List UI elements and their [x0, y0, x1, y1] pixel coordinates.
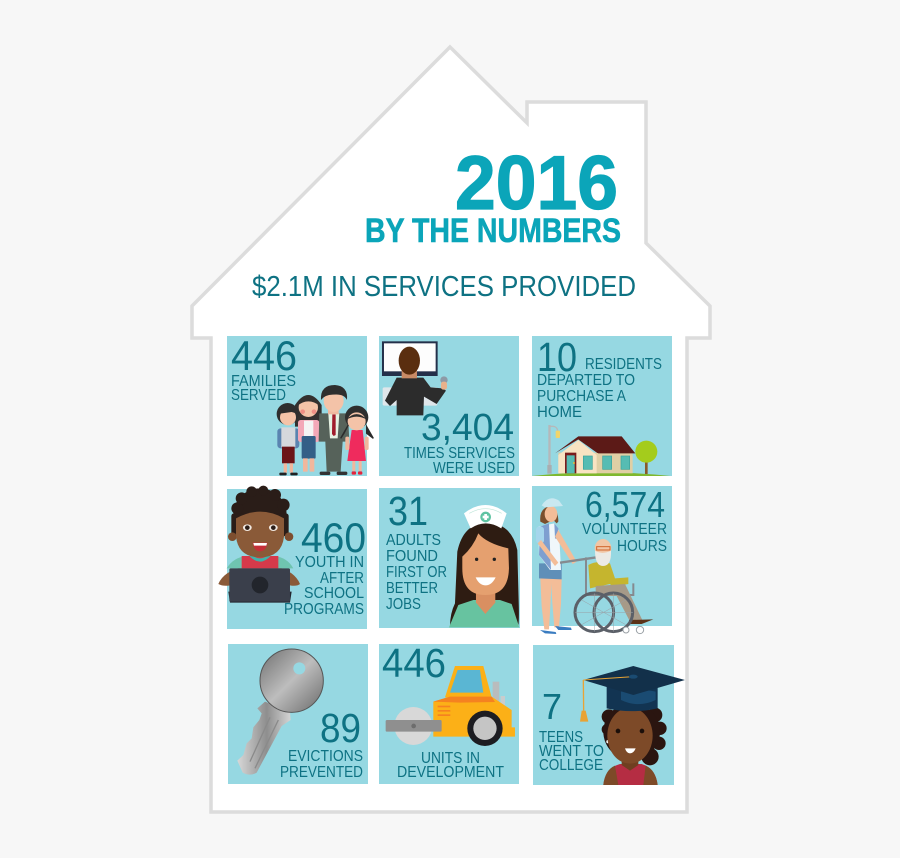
label: times services were used: WERE USED	[433, 460, 515, 477]
subheading: services provided: $2.1M IN SERVICES PROVIDED	[252, 271, 636, 303]
label: evictions prevented	[280, 748, 363, 781]
stat: 460: 460	[301, 514, 366, 561]
stat: 6,574: 6,574	[585, 484, 665, 525]
label: evictions prevented: EVICTIONS	[288, 748, 363, 765]
label: adults found first or better jobs: BETTER	[386, 580, 438, 597]
icon: person at touch screen	[382, 341, 448, 415]
label: teens went to college: COLLEGE	[539, 757, 603, 774]
label: times services were used	[404, 445, 515, 477]
heading: by the numbers: BY THE NUMBERS	[365, 212, 621, 250]
panel: families served	[227, 332, 373, 476]
panel: youth in after school programs	[218, 486, 367, 629]
label: youth in after school programs	[284, 554, 364, 618]
label: residents departed: PURCHASE A	[537, 388, 627, 405]
stat: 3,404: 3,404	[421, 407, 514, 449]
label: times services were used: TIMES SERVICES	[404, 445, 515, 462]
title: 2016: 2016	[455, 141, 618, 226]
panel: adults found jobs	[379, 488, 520, 628]
label: units in development: DEVELOPMENT	[397, 764, 504, 781]
label: youth in after school programs: AFTER	[320, 570, 364, 587]
panel: teens went to college	[533, 645, 685, 785]
label: residents departed	[537, 356, 662, 421]
icon: graduate	[580, 666, 685, 785]
label: units in development: UNITS IN	[421, 750, 480, 767]
icon: family	[277, 385, 373, 475]
label: volunteer hours: HOURS	[617, 538, 667, 555]
stat: 7: 7	[542, 686, 562, 727]
label: adults found first or better jobs: ADULTS	[386, 532, 441, 549]
label: residents departed: RESIDENTS	[585, 356, 662, 373]
label: volunteer hours	[582, 521, 667, 555]
panel: units in development	[379, 640, 519, 784]
panel: services used	[379, 336, 519, 477]
panel: volunteer hours	[532, 484, 672, 634]
label: teens went to college: TEENS	[539, 729, 583, 746]
stat: 446 families: 446	[231, 332, 297, 379]
label: youth in after school programs: YOUTH IN	[295, 554, 364, 571]
label: families served: FAMILIES	[231, 373, 296, 390]
label: volunteer hours: VOLUNTEER	[582, 521, 667, 538]
label: youth in after school programs: SCHOOL	[304, 585, 364, 602]
label: adults found first or better jobs	[386, 532, 447, 613]
icon: house with tree and lamp	[532, 425, 671, 476]
label: teens went to college: WENT TO	[539, 743, 604, 760]
panel: residents purchased a home	[532, 334, 672, 476]
label: residents departed: DEPARTED TO	[537, 372, 635, 389]
label: teens went to college	[539, 729, 604, 774]
stat: 10: 10	[537, 334, 577, 380]
label: units in development	[397, 750, 504, 781]
label: adults found first or better jobs: FOUND	[386, 548, 438, 565]
label: adults found first or better jobs: FIRST OR	[386, 564, 447, 581]
panel: evictions prevented	[228, 644, 368, 784]
icon: road roller	[386, 666, 515, 746]
label: youth in after school programs: PROGRAMS	[284, 601, 364, 618]
stat: 31: 31	[388, 488, 428, 534]
icon: volunteer pushing man in wheelchair	[536, 498, 653, 634]
icon: key	[237, 649, 323, 775]
stat: 446 units: 446	[382, 640, 446, 686]
label: families served: SERVED	[231, 387, 286, 404]
label: families served	[231, 373, 296, 404]
label: evictions prevented: PREVENTED	[280, 764, 363, 781]
label: adults found first or better jobs: JOBS	[386, 596, 421, 613]
label: residents departed: HOME	[537, 404, 582, 421]
stat: 89: 89	[320, 705, 361, 751]
house outline	[192, 47, 710, 812]
icon: nurse	[449, 505, 519, 627]
icon: boy with laptop	[218, 486, 300, 603]
